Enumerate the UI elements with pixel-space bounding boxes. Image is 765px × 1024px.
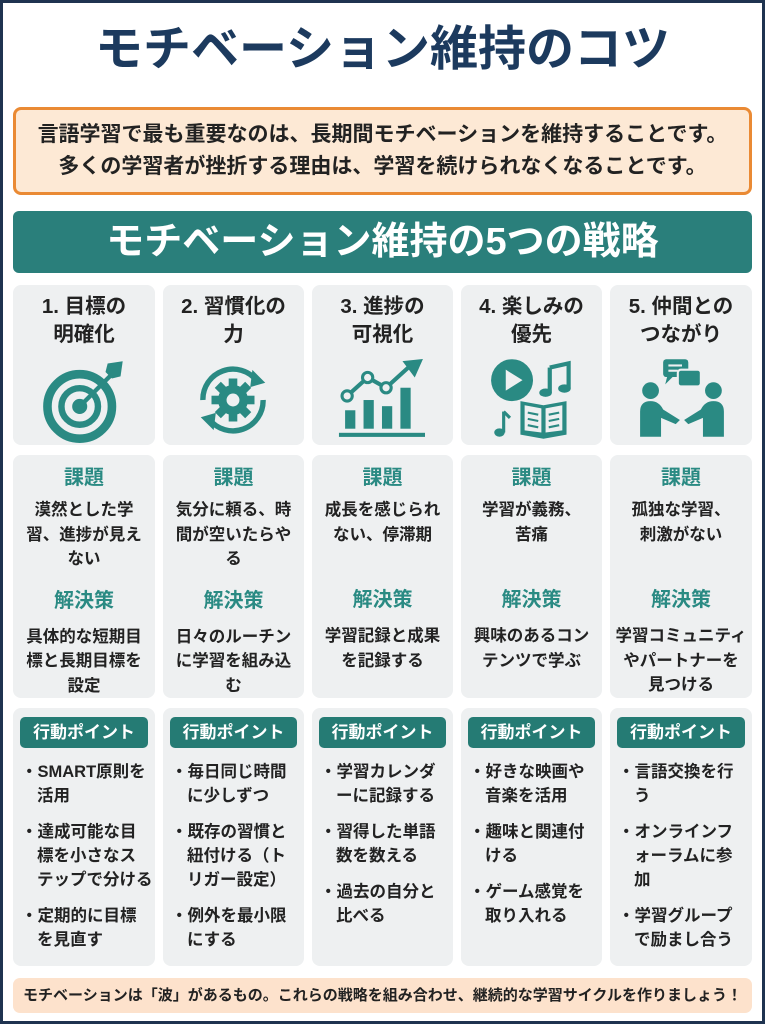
card: title & icon 3: 3. 進捗の [340,295,425,318]
intro box: 多くの学習者が挫折する理由は、学習を続けられなくなることです。 [58,155,707,178]
card: action 1: を見直す [37,931,103,949]
card: title & icon 5: つながり [640,323,722,346]
card: action 5: 加 [634,871,650,889]
card: problem/solution 3: 学習記録と成果 [325,627,440,645]
card: title & icon 2: 力 [223,323,244,346]
card: problem/solution 5 [610,455,752,698]
card: problem/solution 4: 解決策 [502,589,562,611]
card: title & icon 1: 1. 目標の [42,295,126,318]
card: action 5: 行動ポイント [630,723,732,742]
card: problem/solution 4: 興味のあるコン [474,627,589,645]
panel: strategy 2 [163,285,304,966]
intro box [13,107,752,195]
card: problem/solution 3: を記録する [341,652,424,670]
card: action 3: 数を数える [336,847,418,865]
card: action 2: ・既存の習慣と [171,823,286,841]
card: action 4 [461,708,602,966]
card: title & icon 4: 優先 [511,323,552,346]
card: action 2: にする [187,931,237,949]
intro box: 言語学習で最も重要なのは、長期間モチベーションを維持することです。 [38,123,727,146]
card: action 2 [163,708,304,966]
card: problem/solution 5: 解決策 [651,589,711,611]
card: problem/solution 1: 具体的な短期目 [26,628,142,646]
card: action 5: ・言語交換を行 [618,763,734,781]
panel: strategy 5 [610,285,752,966]
card: problem/solution 2: 気分に頼る、時 [176,501,291,519]
card: problem/solution 4: 苦痛 [515,526,548,544]
card: title & icon 3: 可視化 [352,323,413,346]
card: action 1: 行動ポイント [33,723,135,742]
card: title & icon 4: 4. 楽しみの [479,295,584,318]
panel: strategy 4 [461,285,602,966]
card: problem/solution 1: 標と長期目標を [26,652,142,670]
card: action 5: う [634,787,650,805]
card: problem/solution 5: やパートナーを [623,652,739,670]
icon: target [43,361,123,443]
card: action 4: 取り入れる [485,907,568,925]
card: problem/solution 2: 解決策 [204,590,264,612]
card: problem/solution 1: 解決策 [54,590,114,612]
card: action 5: ォーラムに参 [634,847,733,865]
card: action 1: ・定期的に目標 [21,907,136,925]
card: problem/solution 5: 課題 [661,467,701,489]
card: problem/solution 5: 刺激がない [640,526,722,544]
icon: media & book [491,359,571,439]
card: problem/solution 2 [163,455,304,698]
icon: chart [338,359,425,437]
card: action 3: 比べる [336,907,386,925]
card: problem/solution 5: 孤独な学習、 [632,501,730,519]
card: action 4: ・好きな映画や [469,763,584,781]
card: action 4: ける [485,847,518,865]
card: problem/solution 2: に学習を組み込 [176,652,291,670]
panel: strategy 3 [312,285,453,966]
card: problem/solution 2: 課題 [214,467,254,489]
card: problem/solution 1: 設定 [68,676,100,694]
card: action 3: ・習得した単語 [320,823,436,841]
card: action 2: リガー設定） [187,871,286,889]
card: problem/solution 1: 課題 [64,467,104,489]
card: problem/solution 3: 成長を感じられ [325,501,440,519]
card: action 4: 音楽を活用 [485,787,568,805]
card: action 3: ・学習カレンダ [320,763,436,781]
card: action 1 [13,708,155,966]
icon: people & chat [640,359,724,437]
card: problem/solution 5: 見つける [648,676,714,694]
card: problem/solution 1: ない [68,550,100,568]
card: action 3: ・過去の自分と [320,883,436,901]
card: action 5: で励まし合う [634,931,733,949]
card: action 4: ・趣味と関連付 [469,823,584,841]
card: action 2: ・例外を最小限 [171,907,286,925]
card: problem/solution 3: ない、停滞期 [333,526,432,544]
card: action 5 [610,708,752,966]
card: problem/solution 2: 日々のルーチン [176,628,291,646]
card: action 1: ・達成可能な目 [21,823,136,841]
banner [13,211,752,273]
card: action 5: ・学習グループ [618,907,733,925]
card: problem/solution 1: 漠然とした学 [34,501,134,519]
card: problem/solution 2: む [225,676,242,694]
card: problem/solution 3 [312,455,453,698]
card: action 3 [312,708,453,966]
panel: strategy 1 [13,285,155,966]
card: problem/solution 2: 間が空いたらや [176,526,291,544]
card: problem/solution 4 [461,455,602,698]
card: action 4: 行動ポイント [480,723,582,742]
card: problem/solution 4: 学習が義務、 [482,501,581,519]
title: モチベーション維持のコツ [95,23,670,76]
card: title & icon 1 [13,285,155,445]
card: title & icon 1: 明確化 [53,323,115,346]
card: action 2: 紐付ける（ト [187,847,286,865]
card: action 5: ・オンラインフ [618,823,733,841]
card: problem/solution 5: 学習コミュニティ [615,627,746,645]
card: title & icon 5 [610,285,752,445]
card: action 2: 行動ポイント [182,723,284,742]
card: problem/solution 3: 解決策 [352,589,412,611]
card: problem/solution 1 [13,455,155,698]
card: action 3: 行動ポイント [332,723,434,742]
card: title & icon 4 [461,285,602,445]
card: title & icon 3 [312,285,453,445]
card: action 3: ーに記録する [336,787,435,805]
card: action 1: 標を小さなス [37,847,136,865]
card: action 4: ・ゲーム感覚を [469,883,584,901]
card: problem/solution 1: 習、進捗が見え [26,526,142,544]
card: action 2: に少しずつ [187,787,269,805]
card: problem/solution 4: 課題 [512,467,552,489]
card: action 1: ・SMART原則を [21,763,146,781]
card: action 2: ・毎日同じ時間 [171,763,286,781]
banner: モチベーション維持の5つの戦略 [106,221,659,263]
icon: gear cycle [200,366,266,434]
card: title & icon 2 [163,285,304,445]
card: action 1: 活用 [37,787,70,805]
card: problem/solution 4: テンツで学ぶ [482,652,581,670]
footer note [13,978,752,1013]
footer note: モチベーションは「波」があるもの。これらの戦略を組み合わせ、継続的な学習サイクルを作りましょう！ [23,987,742,1004]
card: title & icon 2: 2. 習慣化の [181,295,286,318]
card: title & icon 5: 5. 仲間との [629,295,733,318]
card: problem/solution 3: 課題 [362,467,402,489]
card: action 1: テップで分ける [37,871,152,889]
card: problem/solution 2: る [225,550,242,568]
